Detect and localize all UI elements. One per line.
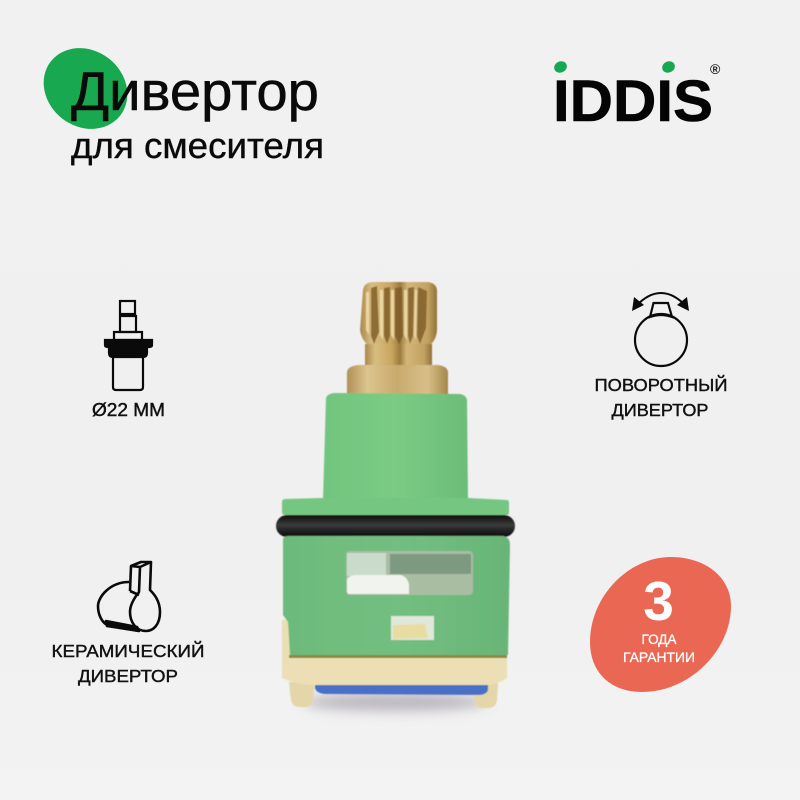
- floor shadow: [303, 693, 487, 711]
- green upper housing: [323, 393, 468, 500]
- feature: rotary diverter: ДИВЕРТОР: [612, 400, 708, 420]
- title: Дивертор: [71, 60, 319, 122]
- feature: diameter: [92, 301, 165, 420]
- icon: ceramic valve: [98, 562, 160, 631]
- splined brass head: [360, 282, 437, 346]
- feature: ceramic diverter: ДИВЕРТОР: [78, 666, 178, 686]
- small window: [391, 616, 434, 640]
- beige tab: [393, 624, 428, 639]
- IDDIS logo: [552, 59, 721, 134]
- green blob behind title: [27, 31, 144, 146]
- title block: [27, 31, 324, 166]
- label: years: ГОДА: [642, 632, 676, 647]
- beige ring: [282, 658, 507, 685]
- brass neck: [365, 344, 432, 368]
- black o-ring: [276, 515, 515, 537]
- green flange: [282, 498, 509, 515]
- icon: rotation knob: [632, 293, 689, 366]
- label: rotary diverter: ПОВОРОТНЫЙ: [594, 374, 728, 395]
- feature: ceramic diverter: [52, 562, 204, 686]
- logo dot right: [660, 59, 677, 75]
- logo dot left: [552, 59, 569, 75]
- label: warranty: ГАРАНТИИ: [623, 650, 695, 665]
- registered mark: ®: [710, 61, 721, 77]
- product photo: diverter cartridge: [276, 282, 515, 711]
- brass collar: [347, 365, 448, 394]
- pale upper block: [347, 553, 386, 576]
- beige lower edge strip: [282, 620, 292, 660]
- white ceramic piece: [347, 575, 409, 594]
- subtitle: для смесителя: [71, 125, 324, 166]
- label: ceramic diverter: КЕРАМИЧЕСКИЙ: [52, 640, 204, 661]
- olive seam line: [289, 655, 507, 658]
- rectangular window: [346, 551, 473, 595]
- blue seat: [315, 684, 488, 695]
- warranty badge: [590, 557, 731, 692]
- red blob: [590, 557, 731, 692]
- right foot: [473, 682, 498, 708]
- green lower body: [283, 536, 510, 655]
- dark inner block: [390, 554, 471, 574]
- label: diameter: Ø22 ММ: [92, 400, 165, 420]
- icon: cartridge outline: [105, 301, 152, 390]
- feature: rotary diverter: [594, 293, 728, 420]
- left foot: [289, 682, 315, 707]
- number three: 3: [643, 570, 674, 632]
- logo wordmark: IDDIS: [553, 69, 713, 134]
